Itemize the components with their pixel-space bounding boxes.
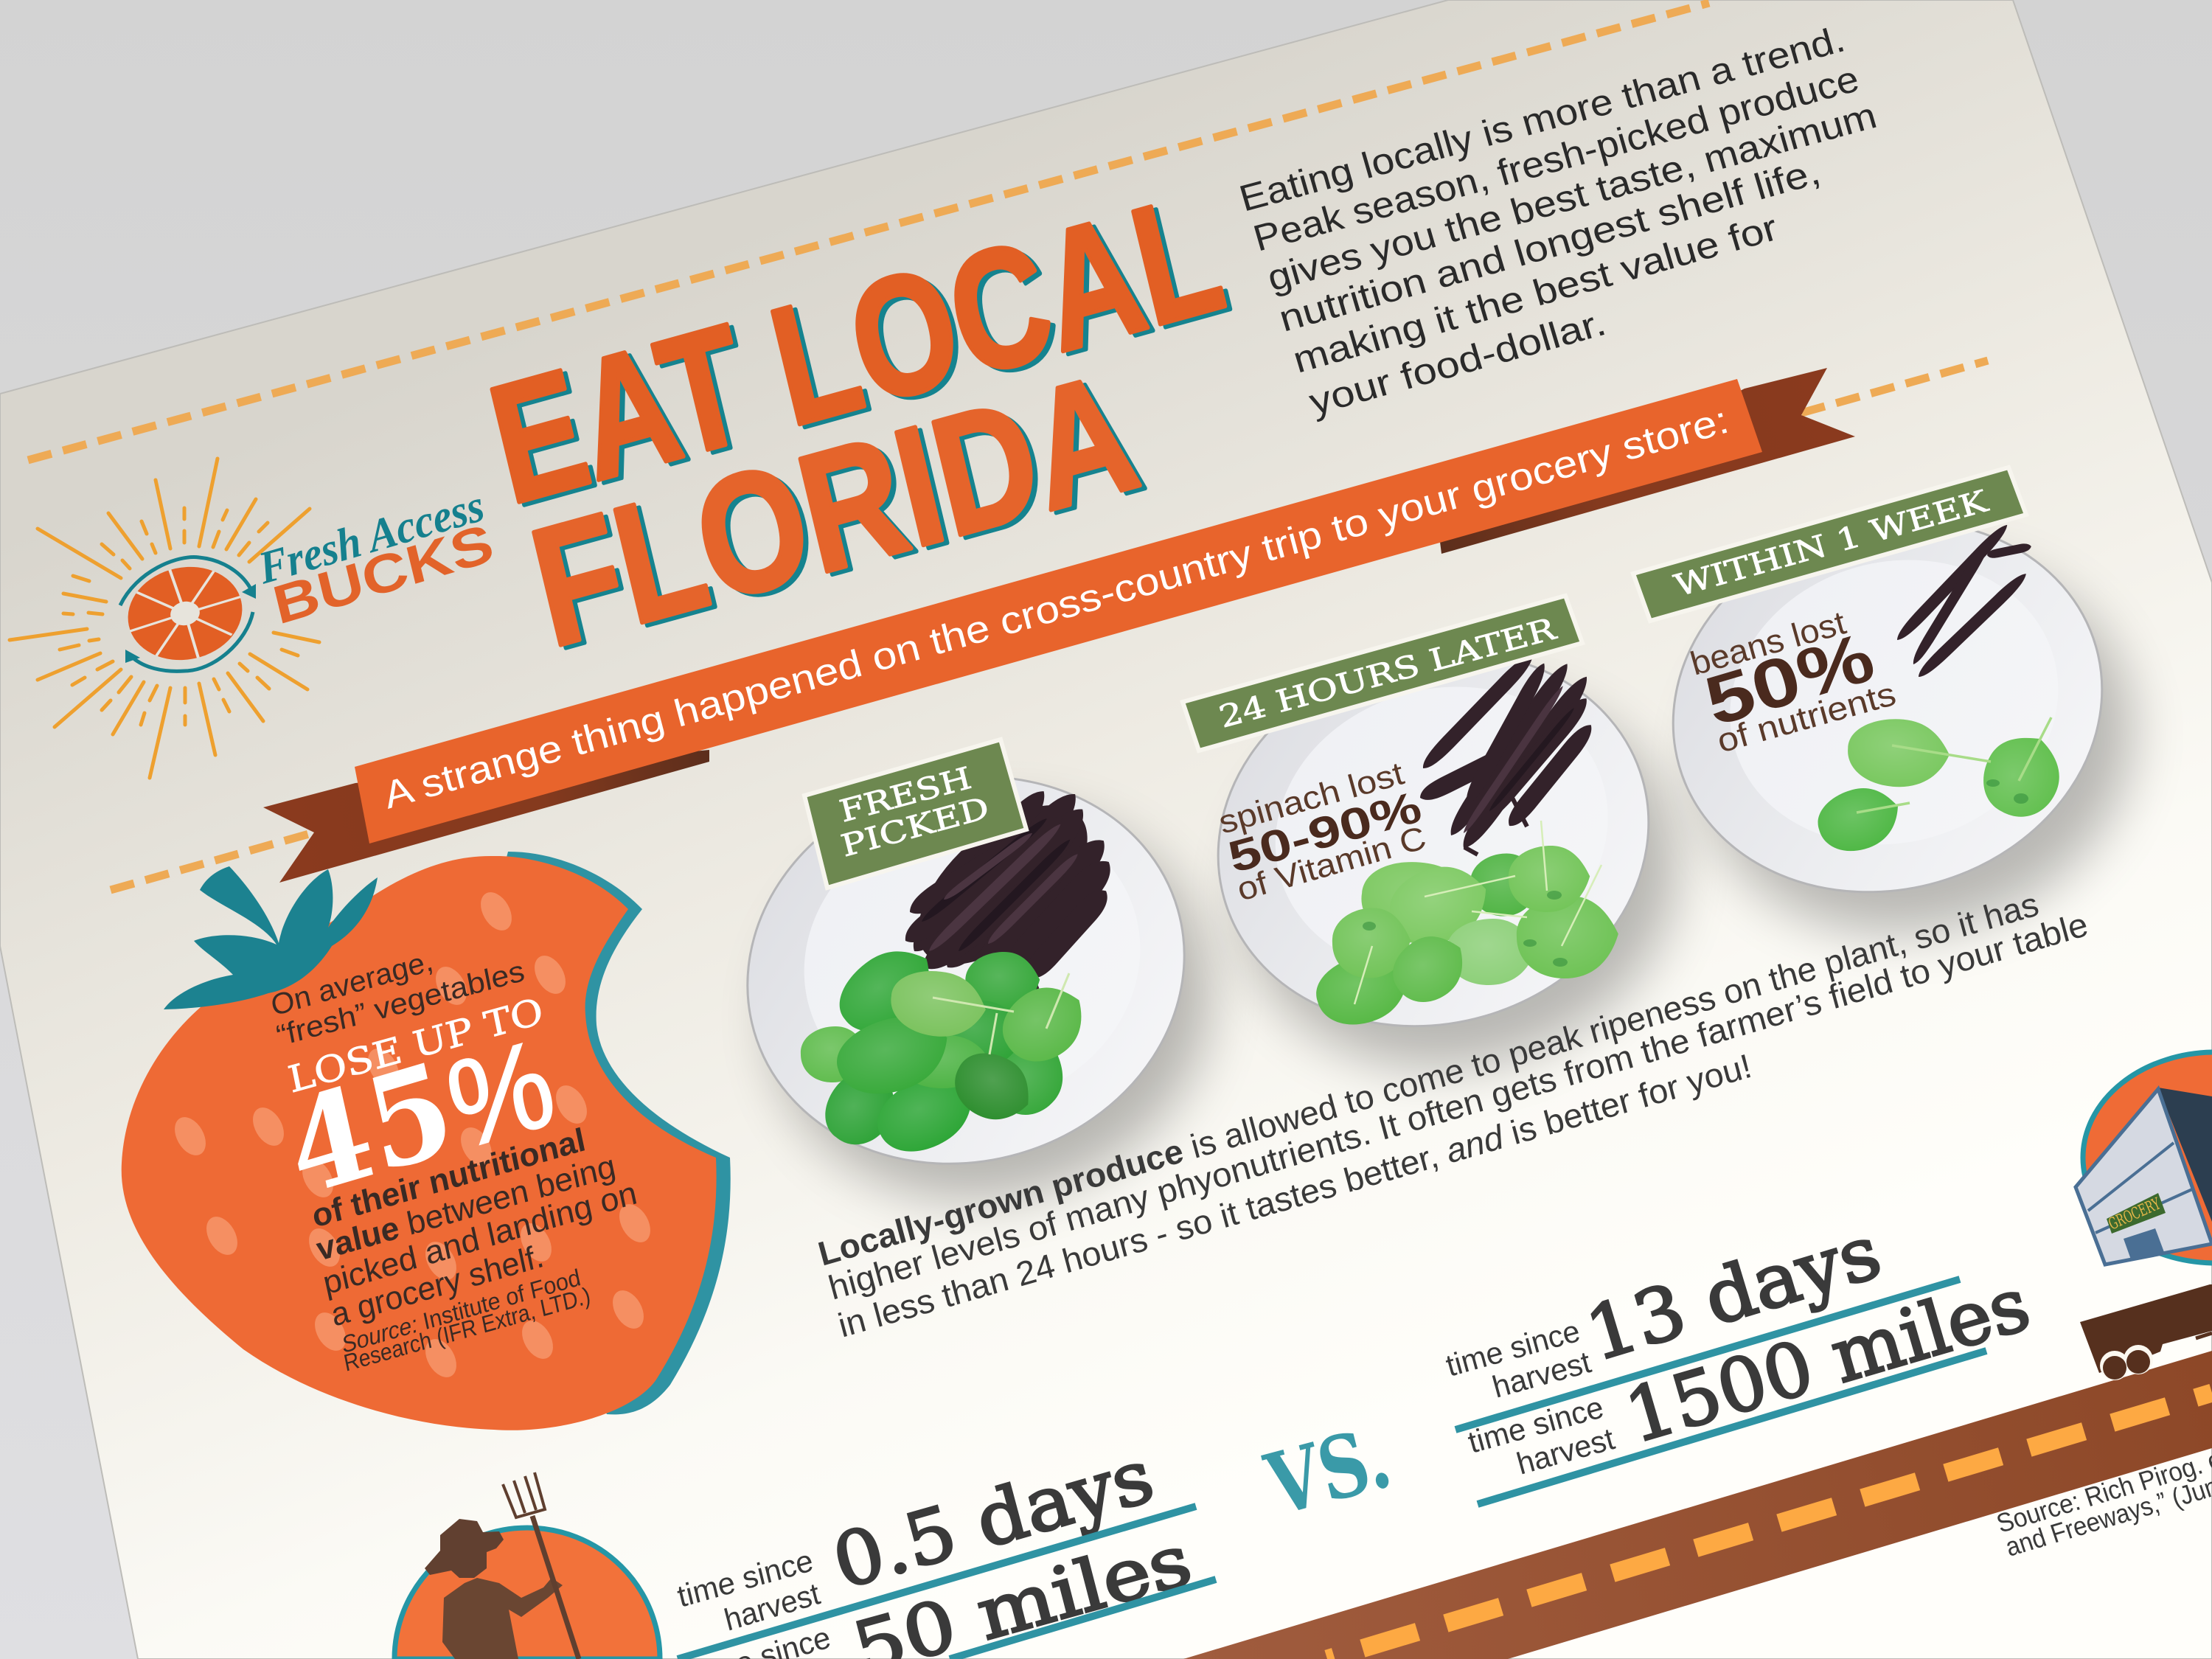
labels — [674, 1543, 834, 1659]
strawberry body — [122, 856, 717, 1430]
strawberry teal edge — [442, 852, 731, 1414]
road — [1183, 1351, 2212, 1659]
strawberry text: Research (IFR Extra, LTD.) — [341, 1282, 593, 1377]
front tyre — [2126, 1350, 2150, 1374]
intro paragraph — [1235, 18, 1881, 423]
icon: orange slice — [119, 557, 251, 670]
rule 1 — [678, 1506, 1196, 1659]
tag: fresh picked: FRESH — [836, 760, 975, 830]
store circle — [2083, 1052, 2212, 1263]
logo: Fresh Access Bucks — [10, 459, 499, 778]
hitch — [2196, 1333, 2212, 1338]
strawberry text: LOSE UP TO — [285, 989, 546, 1102]
strawberry text — [268, 945, 640, 1377]
ribbon body — [355, 379, 1762, 844]
farm circle — [394, 1528, 660, 1659]
strawberry text: of their nutritional — [309, 1121, 588, 1235]
beans, fresh — [891, 776, 1120, 993]
tag: within 1 week — [1633, 467, 2026, 621]
ribbon banner — [263, 368, 1855, 883]
ribbon right tail and fold — [1440, 368, 1855, 554]
rule 2 — [1478, 1351, 1986, 1504]
plate 1 — [701, 726, 1231, 1214]
store sign text: GROCERY — [2106, 1194, 2163, 1234]
strawberry text: 45 — [274, 1032, 466, 1225]
plate 2 stat: of Vitamin C — [1233, 820, 1430, 908]
strawberry text: value between being — [313, 1148, 619, 1268]
logo wordmark: Fresh Access: Fresh Access — [254, 481, 489, 594]
plate 3 stat: 50% — [1697, 618, 1882, 740]
intro paragraph: your food-dollar. — [1304, 302, 1610, 423]
strawberry leaves — [164, 866, 378, 1009]
plate 2 — [1174, 602, 1693, 1077]
strawberry text: picked and landing on — [320, 1175, 640, 1302]
trailer — [2080, 1284, 2212, 1373]
beans, one week — [1893, 521, 2032, 681]
intro paragraph: Eating locally is more than a trend. — [1235, 18, 1849, 220]
spinach, fresh — [801, 933, 1098, 1165]
logo wordmark: Bucks: BUCKS — [268, 513, 499, 636]
spinach, 24 hours — [1309, 821, 1618, 1034]
panel: 24 hours later plate — [1174, 596, 1693, 1077]
spinach, one week — [1812, 714, 2076, 859]
local stats — [674, 1433, 1216, 1659]
ribbon text: A strange thing happened on the cross-country trip to your grocery store: — [379, 399, 1733, 818]
locally-grown paragraph: Locally-grown produce is allowed to come to peak ripeness on the plant, so it has — [814, 884, 2042, 1273]
plate 2 stat: spinach lost — [1215, 755, 1408, 841]
farmer body — [442, 1578, 563, 1659]
plate 1 shadow — [727, 762, 1256, 1251]
rule 1 — [1455, 1279, 1960, 1430]
icon: sunburst rays — [10, 459, 319, 778]
long-distance stats — [1442, 1208, 2039, 1504]
lower dashed line right — [1801, 361, 1988, 413]
labels: harvest — [720, 1576, 824, 1638]
plate 3 stat: beans lost — [1686, 603, 1850, 683]
tag: 24 hours later: 24 HOURS LATER — [1215, 611, 1560, 735]
icon: recycling arrow top — [120, 557, 256, 605]
intro paragraph: making it the best value for — [1288, 206, 1782, 381]
title: Eat Local Florida: FLORIDA — [521, 340, 1157, 686]
panel: within 1 week plate — [1629, 467, 2146, 942]
store dark side — [2158, 1088, 2212, 1222]
pitchfork shaft — [532, 1516, 579, 1659]
ribbon left tail and fold — [263, 750, 709, 883]
store door — [2124, 1228, 2164, 1259]
icon: recycling arrow bottom — [125, 612, 253, 671]
labels: time since — [674, 1543, 816, 1614]
truck icon — [2080, 1284, 2212, 1380]
store sign — [2107, 1193, 2166, 1234]
labels: time since — [1464, 1389, 1607, 1460]
vs label: VS. — [1256, 1407, 1400, 1536]
locally-grown paragraph: in less than 24 hours - so it tastes better, and is better for you! — [834, 1046, 1756, 1345]
panel: fresh picked plate — [701, 726, 1231, 1214]
pitchfork — [503, 1472, 545, 1517]
plate 3 — [1629, 471, 2146, 942]
panel: strawberry callout — [122, 852, 731, 1430]
lower dashed line left — [111, 832, 314, 890]
front wheel — [2124, 1345, 2153, 1374]
tag: 24 hours later — [1183, 596, 1582, 751]
title: Eat Local Florida: EAT LOCAL — [475, 158, 1238, 540]
stat: 0.5 days: 0.5 days — [824, 1433, 1162, 1606]
title: Eat Local Florida — [475, 158, 1243, 686]
store bands — [2088, 1143, 2192, 1233]
labels: time since — [1442, 1313, 1584, 1383]
plate 2 stat: 50-90% — [1223, 782, 1427, 883]
road dashes — [1327, 1393, 2212, 1659]
intro paragraph: Peak season, fresh-picked produce — [1249, 58, 1863, 260]
strawberry text: “fresh” vegetables — [274, 955, 527, 1053]
tag: fresh picked: PICKED — [838, 790, 992, 864]
stat: 13 days: 13 days — [1576, 1208, 1890, 1378]
tag: fresh picked — [804, 740, 1026, 888]
plate 3 stat — [1686, 603, 1900, 760]
rear tyre — [2103, 1356, 2126, 1380]
title: Eat Local Florida: EAT LOCAL — [480, 161, 1243, 543]
labels: harvest — [1513, 1421, 1618, 1481]
beans, 24 hours — [1416, 650, 1598, 855]
labels — [1442, 1313, 1618, 1481]
intro paragraph: gives you the best taste, maximum — [1262, 94, 1881, 299]
plate 3 stat: of nutrients — [1713, 675, 1900, 760]
stat: 1500 miles: 1500 miles — [1616, 1261, 2039, 1460]
plate 2 shadow — [1199, 644, 1721, 1119]
strawberry seeds — [168, 887, 657, 1382]
title: Eat Local Florida: FLORIDA — [516, 337, 1152, 683]
grocery store icon — [2076, 1052, 2212, 1265]
rule 2 — [950, 1579, 1216, 1659]
farmer icon — [394, 1472, 660, 1659]
store front — [2076, 1089, 2212, 1265]
plate 2 stat — [1215, 755, 1430, 908]
strawberry text: % — [436, 1012, 566, 1176]
strawberry text: On average, — [268, 945, 436, 1023]
farmer hat and face — [425, 1519, 504, 1578]
strawberry text: a grocery shelf. — [328, 1238, 547, 1334]
intro paragraph: nutrition and longest shelf life, — [1274, 150, 1825, 340]
rear wheel — [2100, 1351, 2129, 1380]
strawberry text: Source: Institute of Food — [339, 1264, 582, 1358]
top dashed line — [28, 3, 1709, 460]
locally-grown paragraph: higher levels of many phyonutrients. It often gets from the farmer’s field to your table — [824, 905, 2092, 1307]
labels: harvest — [1489, 1344, 1595, 1405]
tag: within 1 week: WITHIN 1 WEEK — [1670, 483, 1993, 604]
plate 3 shadow — [1658, 513, 2176, 984]
